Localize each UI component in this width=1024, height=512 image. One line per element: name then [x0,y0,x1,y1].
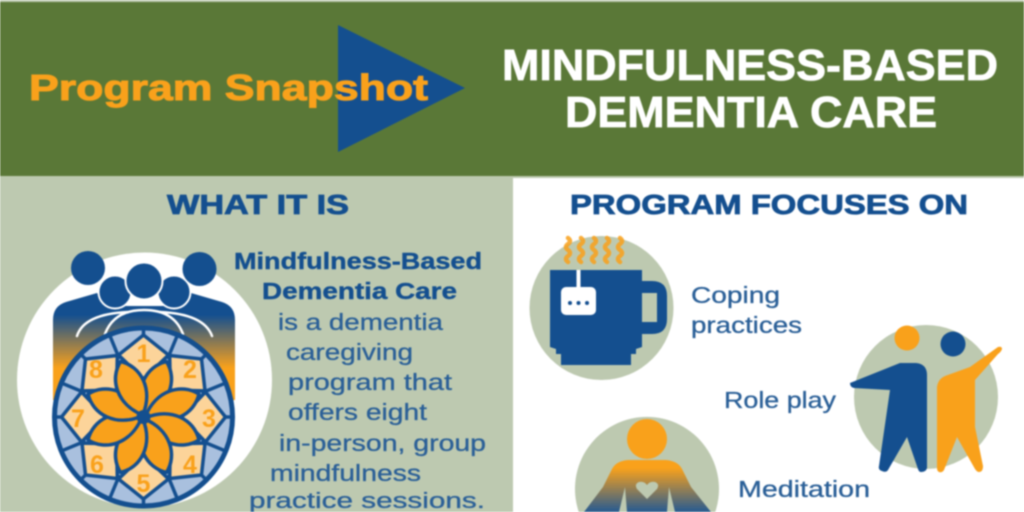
label: coping practices: Coping [691,282,780,308]
panel: program focuses on [513,178,1024,512]
arrow: blue triangle [338,25,465,152]
icon: group of people [53,251,235,400]
heading: what it is: WHAT IT IS [167,189,349,220]
text block: description: in-person, group [279,430,486,456]
panel: what it is [0,178,513,512]
label: role play: Role play [724,387,837,413]
icon: role play figures [850,325,1002,472]
icon: eight-part mandala: 6 [90,451,104,479]
text block: description: mindfulness [270,460,421,486]
label: program snapshot: Program Snapshot [29,67,428,108]
icon: eight-part mandala: 1 [137,340,151,368]
icon: eight-part mandala: 4 [183,451,197,479]
text block: description: program that [288,369,453,395]
icon: eight-part mandala: 8 [89,356,103,384]
icon: eight-part mandala: 5 [137,470,151,498]
icon: eight-part mandala: 2 [183,356,197,384]
label: meditation: Meditation [738,476,870,502]
title [502,41,998,137]
text block: description: caregiving [286,339,413,365]
title: DEMENTIA CARE [565,88,937,137]
title: MINDFULNESS-BASED [502,41,998,90]
text block: description: Dementia Care [262,278,457,304]
icon: eight-part mandala: 7 [71,405,85,433]
panel: header band [0,0,1024,178]
icon: meditating figure [575,417,719,512]
icon: eight-part mandala: 3 [202,405,216,433]
text block: description: is a dementia [278,309,443,335]
icon: group and mandala [17,251,272,508]
label: coping practices: practices [691,312,802,338]
text block: description: offers eight [288,399,428,425]
text block: description [234,248,486,512]
icon: tea mug [530,236,674,380]
heading: program focuses on: PROGRAM FOCUSES ON [570,189,968,220]
icon: eight-part mandala [54,328,232,506]
text block: description: Mindfulness-Based [234,248,482,274]
label: coping practices [691,282,802,338]
